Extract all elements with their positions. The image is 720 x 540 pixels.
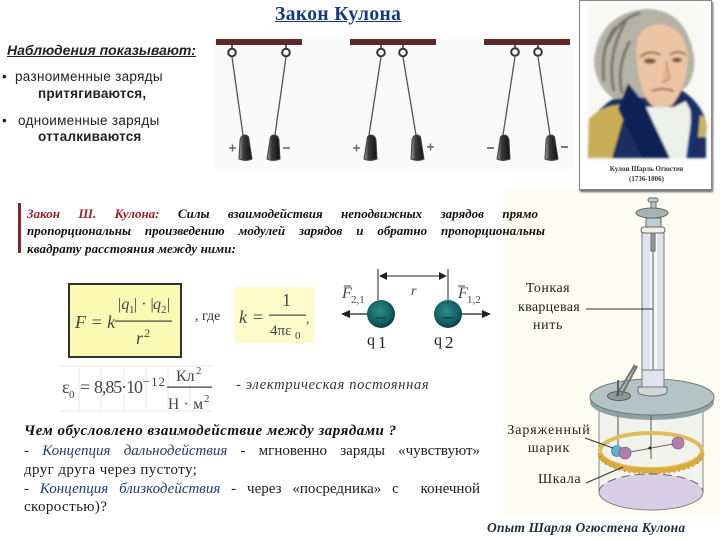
text block: question and concepts: друг друга через пустоту; [24,462,197,478]
text block: question and concepts: скоростью)? [24,499,107,515]
text: | [167,296,170,313]
torsion head [636,198,668,251]
formula: electric constant: = [80,377,90,397]
charge labels: q [434,332,442,349]
text: | · | [134,296,154,313]
pendulum pair: opposite charges attract [216,39,302,160]
text block: observations list: отталкиваются [38,129,142,144]
text block: Coulomb law statement: Закон Ш. Кулона: Силы взаимодействия неподвижных зарядов прямо [27,206,538,221]
text block: Coulomb law statement: квадрату расстояния между ними: [27,241,236,256]
text block: observations list: одноименные заряды [18,113,160,128]
text: k [239,307,248,327]
diagram: two charges: r [411,284,417,299]
formula: electric constant: 8,85·10 [94,377,143,397]
lid [590,365,714,420]
diagram: Coulomb torsion balance [507,198,714,510]
text block: observations list: разноименные заряды [15,69,163,84]
charge labels: q [367,332,375,349]
label: charged ball: шарик [528,441,570,456]
text: = [253,307,263,327]
formula: electric constant: 2 [204,393,210,405]
jar [599,400,703,510]
text: 0 [295,330,301,342]
force labels: 1,2 [467,294,481,306]
text block: observations list: • [2,69,7,84]
text block: question and concepts: - Концепция близкодействия - через «посредника» с конечной [24,481,480,497]
caption: Coulomb experiment: Опыт Шарля Огюстена Кулона [487,520,685,535]
accent bar [18,203,21,253]
text: 4πε [270,323,291,339]
charge labels: 2 [445,333,454,352]
force labels: F [341,285,352,302]
formula: Coulomb force [68,283,182,358]
chart: three pendulum diagrams [216,39,570,161]
portrait caption: (1736-1806) [629,175,664,183]
label: charged ball [507,423,591,456]
text block: question and concepts: - Концепция дальнодействия - мгновенно заряды «чувствуют» [24,443,480,459]
label: charged ball: Заряженный [507,423,591,438]
apparatus background [503,190,720,514]
portrait of Coulomb [579,0,712,190]
pendulum pair: like charges repel [484,39,570,160]
pendulum pair: opposite charges attract, reversed [350,39,436,160]
title: Закон Кулона [275,4,401,25]
text: , [306,312,310,327]
force arrows [341,310,491,318]
charge labels: 1 [378,333,386,352]
formula: electric constant: 2 [196,365,202,377]
label: where: , где [195,309,220,324]
diagram: two charges [341,269,491,352]
text: 2 [161,304,166,316]
formula: electric constant: ε [62,377,70,397]
formula: electric constant: Кл [176,368,195,385]
text block: observations list [2,69,163,144]
distance arrow r [378,269,448,300]
portrait caption: Кулон Шарль Огюстен [610,165,683,173]
gold scale ring [600,414,702,474]
text: 1 [129,304,134,316]
text block: Coulomb law statement [26,206,545,256]
text block: question and concepts: Чем обусловлено взаимодействие между зарядами ? [24,423,397,439]
text block: observations list: • [2,113,7,128]
text block: Coulomb law statement: пропорциональны произведению модулей зарядов и обратно пропорциональны [27,223,545,238]
text: r [136,328,144,348]
formula: electric constant: 0 [69,389,75,401]
label: thin quartz thread: кварцевая [518,300,580,315]
text block: question and concepts [24,423,480,515]
charge balls [367,300,462,328]
label: scale: Шкала [538,472,581,487]
text: q [153,296,161,313]
label: thin quartz thread: Тонкая [526,281,570,296]
heading: observations: Наблюдения показывают: [7,42,196,58]
force labels: F [457,285,468,302]
formula: constant k [235,287,314,343]
panel: pendulums background [213,37,573,169]
glass tube [642,232,664,388]
text: 2 [144,326,150,340]
text: |q [117,296,129,313]
leader lines [585,309,653,483]
formula: electric constant: −12 [143,374,165,389]
text: 1 [282,290,291,310]
charge labels [367,332,454,352]
text: F = k [74,312,116,332]
text block: observations list: притягиваются, [38,86,146,101]
portrait caption [610,165,683,183]
label: thin quartz thread [518,281,580,333]
formula: electric constant: Н · м [168,396,203,413]
force labels: 2,1 [351,294,365,306]
label: thin quartz thread: нить [533,318,563,333]
formula: electric constant [60,365,212,413]
portrait painting [586,6,708,160]
balls and rocker [612,437,684,459]
force labels [341,285,481,306]
label: electric constant: - электрическая постоянная [236,377,429,393]
